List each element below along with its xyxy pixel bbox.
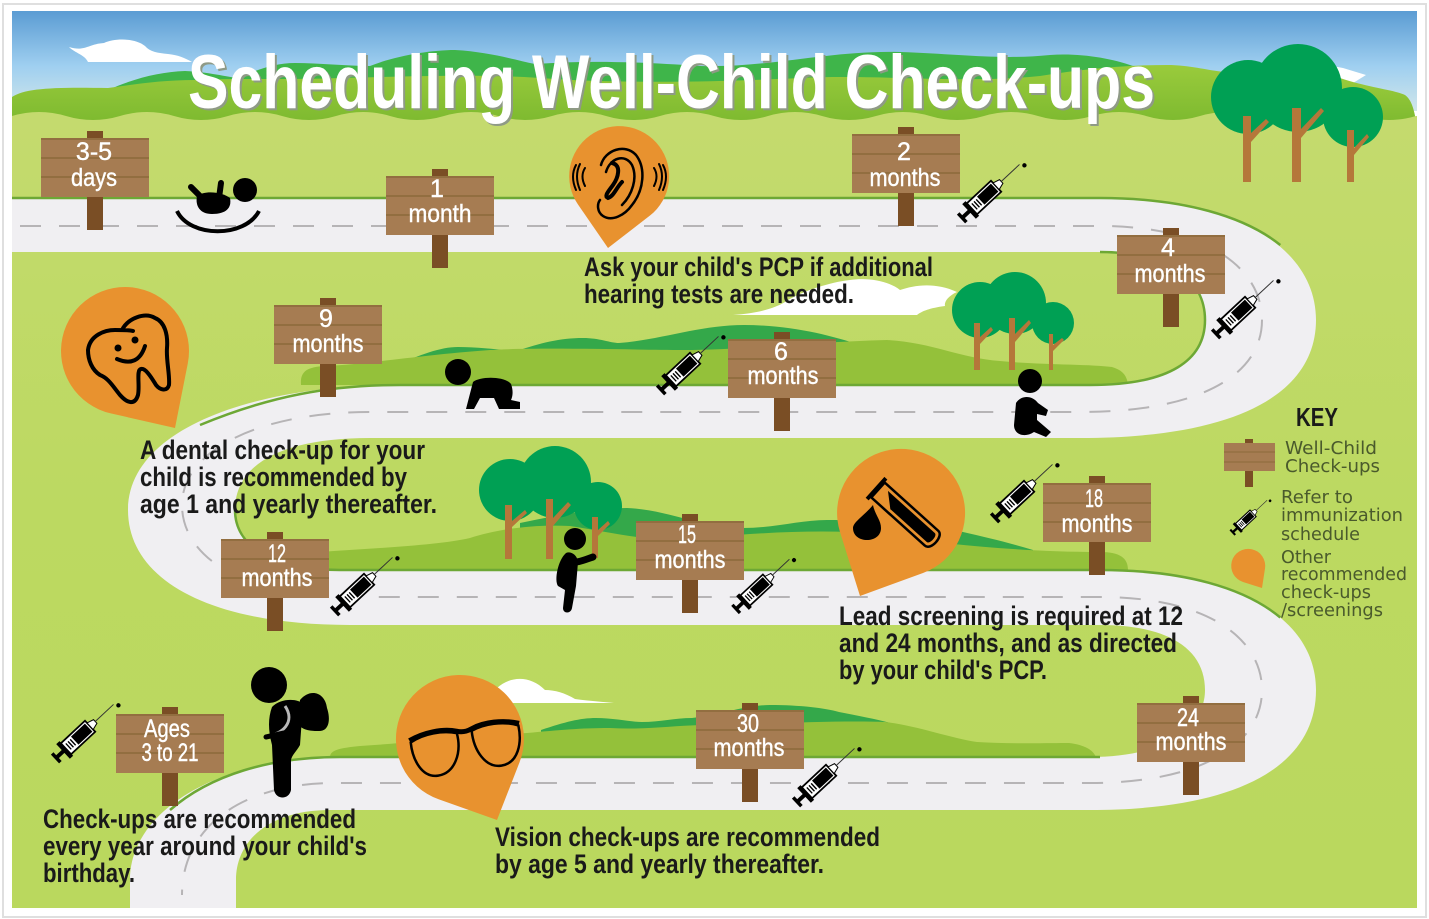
trees: upper right [1211,44,1383,182]
title: Scheduling Well-Child Check-ups [188,40,1155,125]
icon: teen with backpack [251,667,329,798]
sign: 2 months [852,127,960,226]
sign: 1 month: 1 [430,175,444,203]
syringe: 4 months [1208,270,1284,342]
sign: ages 3 to 21 [116,707,224,806]
sign: 1 month: month [408,200,472,228]
sign: 9 months: 9 [319,305,333,333]
sign: 18 months [1043,476,1151,575]
sign: 15 months: months [654,546,726,574]
key: immunization label: Refer to [1281,487,1353,508]
icon: glasses [409,718,525,779]
distant dark hills [108,50,1133,110]
text: lead screening note: by your child's PCP. [839,655,1047,685]
text: lead screening note: Lead screening is required at 12 [839,601,1183,631]
sign: 15 months [636,514,744,613]
text: dental note: age 1 and yearly thereafter. [140,489,437,519]
text: annual check-up note: Check-ups are recommended [43,804,356,834]
clouds: upper sky [69,40,1366,95]
text: lead screening note: and 24 months, and as directed [839,628,1177,658]
text: vision note: Vision check-ups are recommended [495,822,880,852]
sign: 12 months [221,532,329,631]
text: hearing note: hearing tests are needed. [584,279,854,309]
sign: 4 months: 4 [1161,234,1175,262]
icon: standing child [556,528,593,612]
text: dental note: child is recommended by [140,462,407,492]
winding road [12,198,1316,908]
key: other screenings label [1281,547,1407,621]
key: well-child label [1285,438,1380,477]
pin: hearing [569,126,669,248]
trees: middle [952,272,1074,370]
key: other screenings label: recommended [1281,564,1407,585]
sign: 15 months: 15 [678,521,696,549]
syringe: 12 months [327,547,403,619]
text: hearing note [584,252,933,309]
key: well-child label: Well-Child [1285,438,1377,459]
pin: vision [396,675,525,820]
syringe: 18 months [987,454,1063,526]
sign: 9 months [274,298,382,397]
icon: sitting toddler [1014,369,1051,437]
icon: ear [573,149,666,218]
text: vision note [495,822,880,879]
sign: 6 months [728,332,836,431]
text: annual check-up note [43,804,367,888]
sign: 12 months: 12 [268,540,286,568]
key: orange pin icon [1231,549,1265,588]
key: immunization label: immunization [1281,505,1403,526]
sign: 4 months [1117,228,1225,327]
key: well-child label: Check-ups [1285,456,1380,477]
text: dental note: A dental check-up for your [140,435,425,465]
sign: 18 months: months [1062,510,1132,538]
icon: newborn in cradle [177,178,259,231]
sign: 24 months: months [1156,728,1226,756]
sign: 30 months: months [714,734,784,762]
text: dental note [140,435,437,519]
syringe: 2 months [954,154,1030,226]
syringe: 6 months [653,326,729,398]
text: annual check-up note: birthday. [43,858,135,888]
cloud behind hills: row two [733,279,957,315]
key: immunization label [1281,487,1403,545]
key: immunization label: schedule [1281,524,1360,545]
text: vision note: by age 5 and yearly thereafter. [495,849,824,879]
mid green hill band [12,65,1225,125]
key: other screenings label: /screenings [1281,600,1383,621]
sign: ages 3 to 21: 3 to 21 [142,739,198,767]
sign: 4 months: months [1134,260,1206,288]
syringe: ages 3 to 21 [48,694,124,766]
key: sign icon [1224,439,1275,487]
key: other screenings label: Other [1281,547,1332,568]
sign: 12 months: months [242,564,312,592]
sign: 6 months: months [748,362,818,390]
trees: lower [479,446,622,559]
syringe: 30 months [789,738,865,810]
text: hearing note: Ask your child's PCP if additional [584,252,933,282]
pin: lead screening [837,449,965,596]
key heading: KEY [1296,402,1338,432]
sign: 30 months: 30 [737,710,759,738]
icon: tooth [88,316,169,402]
text: annual check-up note: every year around your child's [43,831,367,861]
pin: dental [61,287,189,428]
text: lead screening note [839,601,1183,685]
sign: 1 month [386,169,494,268]
key: syringe icon [1228,494,1273,537]
sign: ages 3 to 21: Ages [144,715,190,743]
sky background [12,11,1417,111]
key legend [1224,402,1407,621]
syringe: 15 months [729,549,799,617]
sign: 2 months: 2 [897,138,911,166]
sign: 6 months: 6 [774,338,788,366]
sign: 3-5 days: 3-5 [76,138,112,166]
key: other screenings label: check-ups [1281,582,1371,603]
sign: 30 months [696,703,804,802]
sign: 3-5 days: days [71,164,117,192]
sign: 18 months: 18 [1085,485,1103,513]
sign: 24 months: 24 [1177,704,1199,732]
sign: 3-5 days [41,131,149,230]
hills: row two [301,325,1128,385]
icon: test tube and drop [853,478,945,553]
cloud behind hills: row four [497,679,614,703]
sign: 9 months: months [292,330,364,358]
sign: 24 months [1137,696,1245,795]
icon: crawling baby [445,359,520,409]
hills: row four [330,705,1096,757]
hills: row three [320,508,1128,570]
sign: 2 months: months [870,164,940,192]
